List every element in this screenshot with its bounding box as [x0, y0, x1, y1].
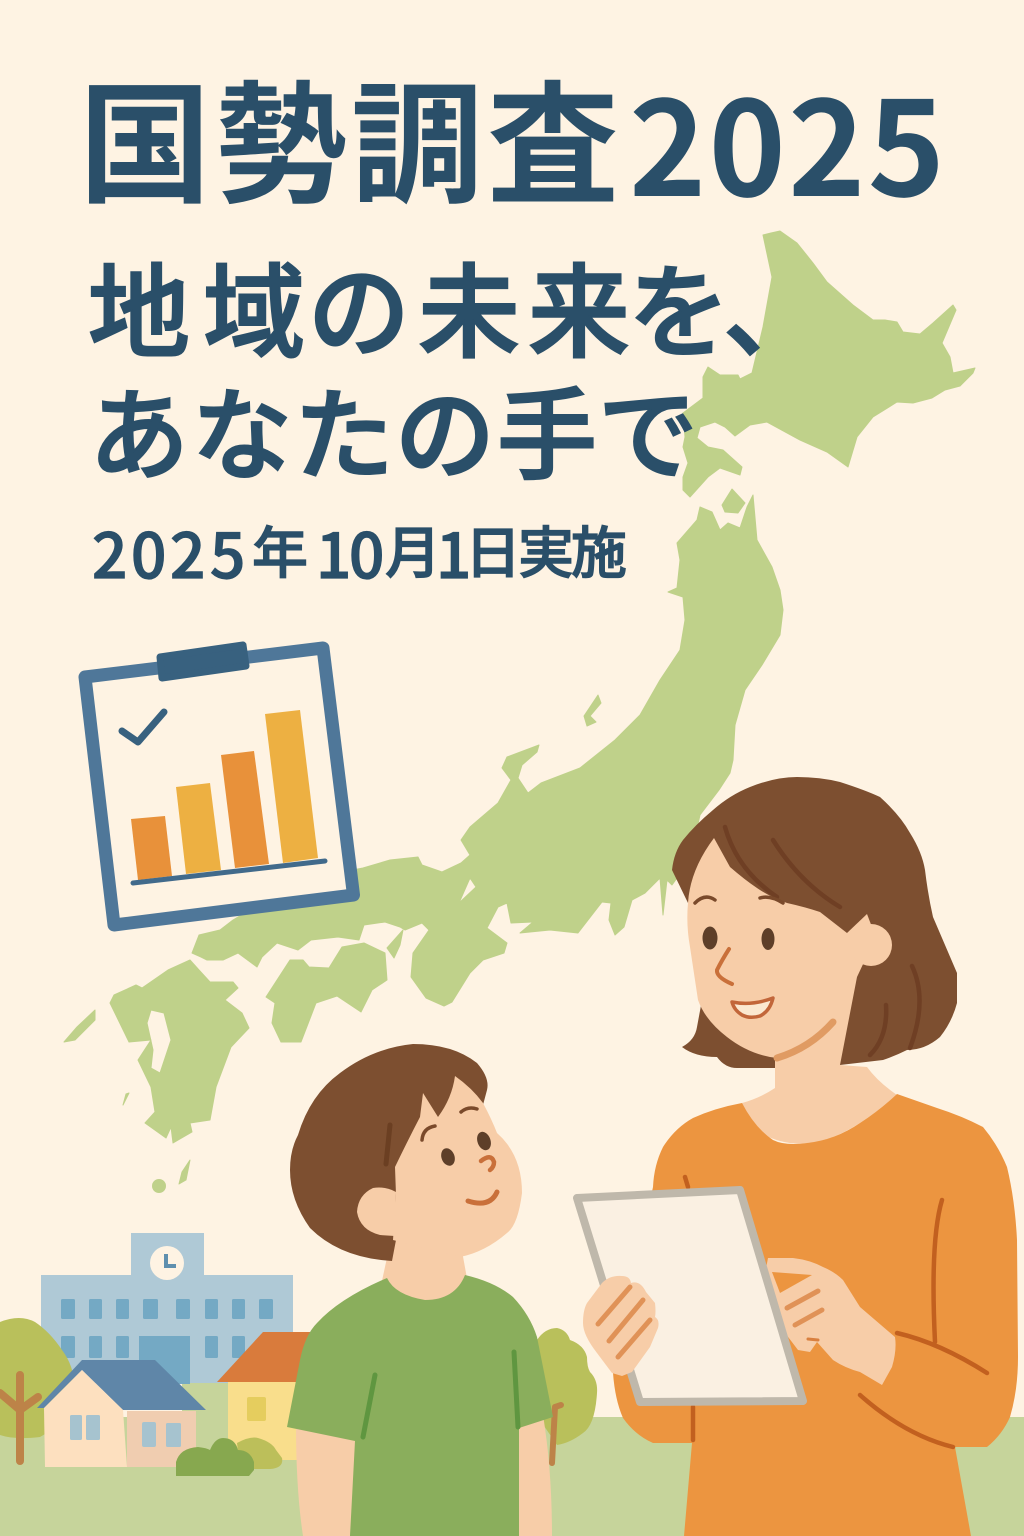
woman nose — [717, 949, 732, 984]
boy brows — [422, 1108, 477, 1140]
woman hair — [672, 777, 957, 1068]
woman sweater — [613, 1094, 1018, 1536]
woman mouth — [732, 998, 773, 1017]
boy arms — [296, 1415, 552, 1536]
clipboard clip — [160, 645, 246, 678]
survey date: 2025 — [92, 506, 245, 596]
title — [79, 40, 945, 234]
boy face — [393, 1076, 522, 1257]
title: 国勢調査 — [79, 40, 619, 231]
bar chart — [131, 710, 325, 883]
woman neck — [742, 977, 897, 1144]
subtitle: あなたの手で — [89, 355, 698, 500]
house windows — [70, 1415, 181, 1447]
sweater folds — [685, 1177, 987, 1447]
jaw line — [777, 1022, 833, 1058]
ground — [0, 1383, 1024, 1536]
survey date: 実 — [518, 509, 574, 590]
survey date: 日 — [465, 509, 521, 590]
right tree — [537, 1328, 597, 1463]
boy nose — [481, 1157, 494, 1170]
survey date: 月 — [385, 509, 441, 590]
clock — [150, 1246, 184, 1280]
boy — [287, 1044, 553, 1536]
woman brows — [695, 897, 783, 903]
map: Tsushima — [64, 1010, 95, 1042]
clipboard frame — [85, 648, 354, 925]
subtitle: 地域の未来を、 — [88, 232, 825, 379]
icon: clipboard with bar chart — [85, 645, 354, 925]
survey date: 年 — [252, 509, 308, 590]
survey date: 1 — [436, 506, 471, 596]
blue roof house — [37, 1360, 206, 1467]
boy mouth — [468, 1192, 497, 1203]
woman ear — [850, 924, 892, 966]
boy hair strand — [386, 1125, 390, 1164]
map: Kyushu — [110, 960, 249, 1143]
woman eyes — [702, 926, 718, 950]
woman — [577, 777, 1018, 1536]
title: 2025 — [629, 44, 945, 234]
left tree — [0, 1318, 74, 1461]
left hand — [583, 1276, 659, 1376]
survey date: 10 — [316, 506, 384, 596]
map: Tanegashima — [179, 1160, 190, 1184]
map: Sado island — [584, 695, 601, 726]
bushes — [176, 1438, 282, 1476]
map: Awaji island — [387, 930, 403, 958]
survey date: 施 — [571, 509, 627, 590]
map: Koshikijima — [123, 1093, 129, 1105]
right hand — [760, 1258, 896, 1385]
tablet — [577, 1190, 803, 1402]
yellow house — [217, 1332, 313, 1460]
check mark — [122, 712, 164, 742]
woman face — [687, 838, 872, 1058]
map: Shikoku — [266, 943, 387, 1042]
school windows and door — [61, 1299, 273, 1384]
boy shirt — [287, 1275, 553, 1536]
boy hair — [290, 1044, 488, 1261]
map: Honshu — [192, 495, 783, 1006]
map: Hokkaido — [683, 231, 975, 497]
shirt folds — [363, 1352, 518, 1437]
boy ear — [357, 1188, 396, 1236]
boy eyes — [439, 1146, 457, 1168]
subtitle — [88, 232, 825, 500]
hair strands — [725, 827, 920, 1055]
map of Japan — [64, 231, 975, 1192]
map: Aomori islet — [722, 489, 745, 513]
boy neck — [380, 1230, 470, 1310]
school building — [41, 1233, 293, 1384]
map: Yakushima — [152, 1180, 166, 1192]
